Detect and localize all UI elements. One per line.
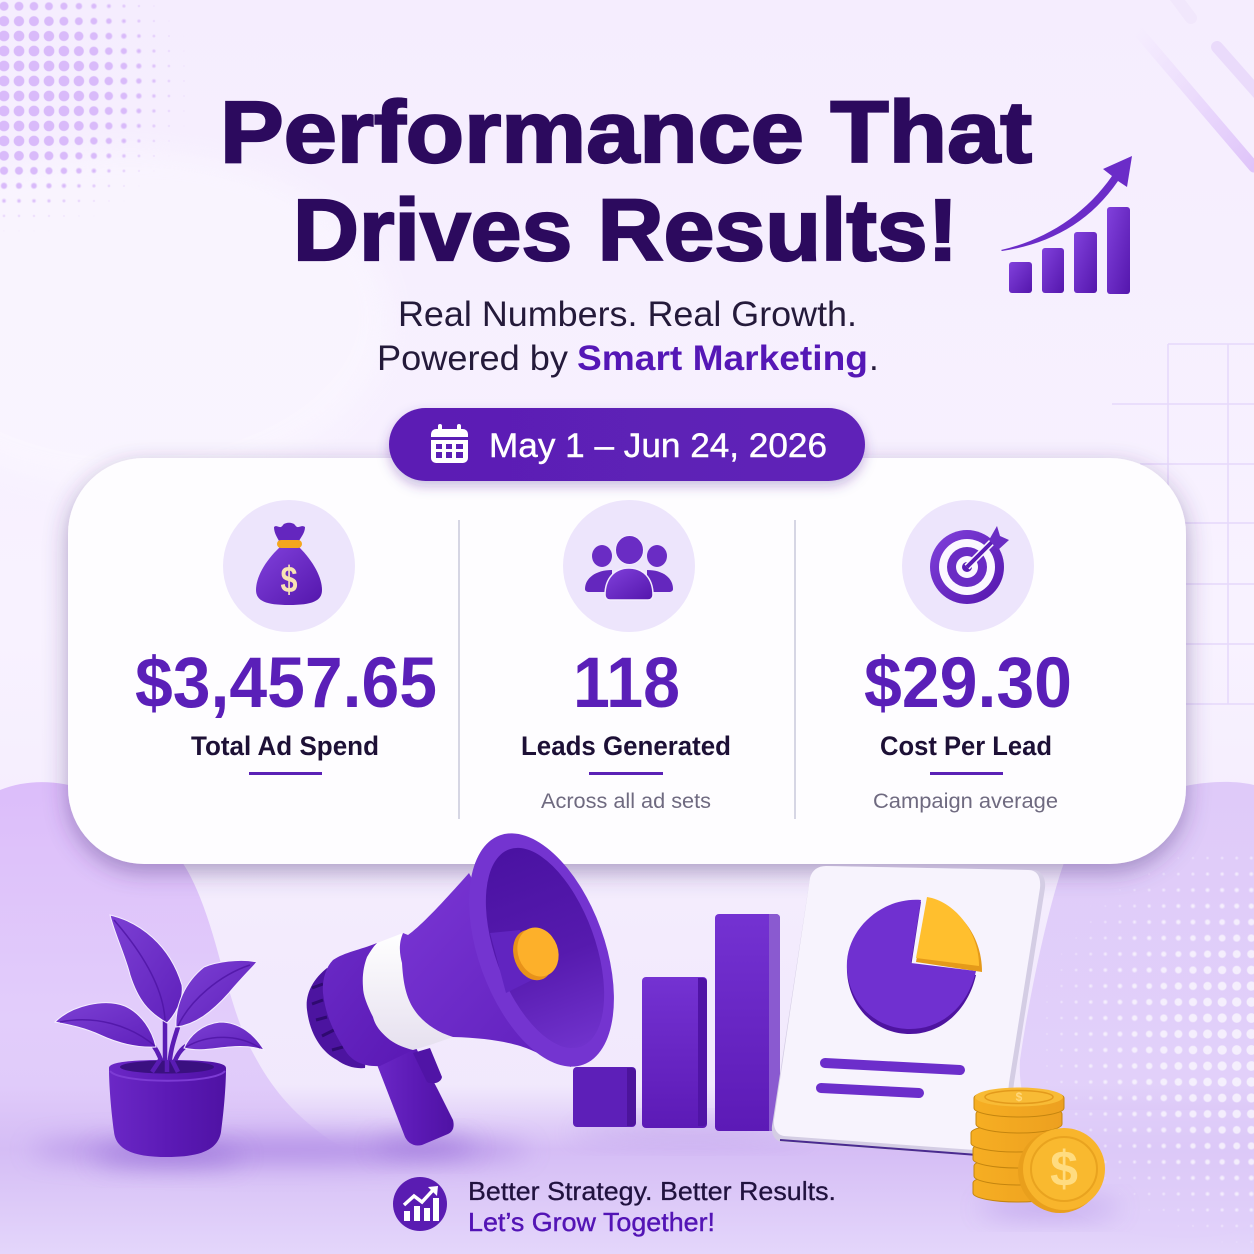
front coin: $ — [1050, 1141, 1078, 1197]
middle bar — [642, 977, 707, 1128]
pie main slice — [847, 900, 976, 1034]
driver — [490, 930, 532, 993]
footer line two: Let’s Grow Together! — [468, 1207, 715, 1237]
illustration: megaphone — [307, 814, 642, 1146]
footer tagline — [393, 1176, 836, 1237]
note: campaign average: Campaign average — [873, 790, 1058, 813]
icon: money bag — [223, 500, 355, 632]
bell cone — [400, 873, 571, 1067]
pot — [109, 1060, 226, 1157]
title: Drives Results! — [293, 182, 958, 279]
label: cost per lead: Cost Per Lead — [880, 731, 1052, 761]
icon: rising bar chart with arrow — [1001, 156, 1132, 294]
underline — [249, 772, 322, 775]
underline — [930, 772, 1003, 775]
ribbed back cap — [307, 968, 370, 1068]
icon: growth badge — [393, 1177, 447, 1231]
pie yellow slice — [916, 897, 982, 972]
subtitle: Smart Marketing — [577, 339, 868, 378]
icon: people group — [563, 500, 695, 632]
metric: leads generated — [521, 500, 731, 813]
white band — [363, 933, 453, 1050]
illustration: coin stack — [971, 1088, 1105, 1213]
text lines — [825, 1063, 960, 1070]
subtitle: . — [869, 339, 879, 378]
title: Performance That — [220, 84, 1032, 181]
illustration: 3d bars — [573, 914, 780, 1131]
bell interior — [462, 832, 628, 1064]
plant stems — [153, 1020, 186, 1070]
illustration: potted plant — [55, 915, 264, 1157]
leaves — [55, 915, 264, 1050]
small bar — [573, 1067, 636, 1127]
tall bar — [715, 914, 780, 1131]
subtitle: Powered by — [377, 339, 569, 378]
document sheet — [774, 866, 1040, 1152]
bell rim — [441, 814, 642, 1086]
value: $29.30: $29.30 — [864, 644, 1072, 723]
panel: metrics card — [68, 458, 1186, 864]
title — [220, 84, 1032, 279]
value: 118: 118 — [573, 644, 680, 723]
floor shadows — [30, 1126, 1120, 1214]
note: across all ad sets: Across all ad sets — [541, 790, 711, 813]
document base line — [780, 1140, 1004, 1157]
illustration: coin stack: $ — [1016, 1090, 1023, 1104]
illustration: report document with pie chart — [772, 866, 1045, 1158]
metric: cost per lead — [864, 500, 1072, 813]
footer line one: Better Strategy. Better Results. — [468, 1176, 836, 1206]
barrel — [323, 943, 413, 1066]
subtitle — [377, 295, 879, 378]
document edge — [772, 866, 1045, 1158]
icon: target with arrow — [902, 500, 1034, 632]
handle — [376, 1046, 454, 1146]
label: total ad spend: Total Ad Spend — [191, 731, 379, 761]
icon: calendar — [431, 424, 468, 463]
trigger — [413, 1048, 442, 1083]
underline — [589, 772, 663, 775]
value: $3,457.65: $3,457.65 — [135, 644, 437, 723]
date range: May 1 – Jun 24, 2026 — [489, 427, 827, 465]
icon: money bag: $ — [280, 559, 298, 600]
orange cap — [506, 922, 565, 986]
label: leads generated: Leads Generated — [521, 731, 731, 761]
metric: total ad spend — [135, 500, 437, 775]
date pill — [389, 408, 865, 481]
subtitle: Real Numbers. Real Growth. — [398, 295, 857, 334]
